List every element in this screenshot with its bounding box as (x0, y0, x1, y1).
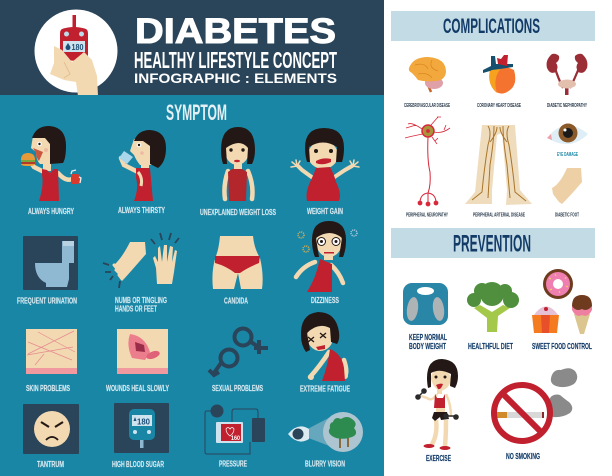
label: numb or tingling hands or feet: HANDS OR FEET (115, 304, 157, 314)
label: pressure: PRESSURE (219, 460, 247, 468)
label: diabetic foot: DIABETIC FOOT (555, 212, 579, 218)
subtitle: HEALTHY LIFESTYLE CONCEPT (134, 47, 337, 73)
icon: dizzy woman (296, 221, 357, 292)
icon: blood sugar meter (114, 403, 169, 453)
banner: complications (391, 11, 595, 41)
label: always hungry: ALWAYS HUNGRY (28, 207, 74, 216)
icon: woman losing weight (221, 127, 255, 201)
label: exercise: EXERCISE (426, 453, 451, 463)
icon: angry face (23, 404, 79, 454)
icon: blurry vision (288, 412, 363, 452)
label: sexual problems: SEXUAL PROBLEMS (212, 384, 263, 393)
label: coronary heart disease: CORONARY HEART DISEASE (477, 103, 521, 109)
label: eye damage: EYE DAMAGE (557, 152, 578, 158)
label: candida: CANDIDA (224, 296, 248, 306)
icon: no smoking (492, 368, 577, 441)
icon: blood pressure monitor (205, 404, 265, 454)
banner: prevention (391, 228, 595, 258)
label: wounds heal slowly: WOUNDS HEAL SLOWLY (106, 384, 169, 393)
label: keep normal body weight: KEEP NORMAL (409, 332, 447, 342)
panel: prevention (391, 228, 595, 463)
icon: glucose meter in hand: 180 (72, 43, 84, 52)
icon: brain (409, 57, 446, 92)
label: blurry vision: BLURRY VISION (305, 460, 345, 468)
heading: symptom: SYMPTOM (166, 100, 227, 125)
label: peripheral arterial disease: PERIPHERAL ARTERIAL DISEASE (473, 212, 525, 218)
title: DIABETES (135, 12, 336, 51)
icon: sexual symbols (209, 328, 268, 375)
panel: header (0, 0, 384, 96)
icon: cupcake (532, 306, 559, 333)
icon: candida (212, 236, 263, 289)
icon: kidneys (547, 54, 587, 95)
icon: eye (547, 124, 588, 144)
icon: glucose meter in hand (34, 10, 118, 96)
icon: toilet (23, 236, 78, 290)
icon: heart (483, 55, 515, 94)
icon: woman gaining weight (291, 128, 359, 201)
icon: legs arteries (465, 125, 532, 205)
icon: blood pressure monitor: 160 (231, 435, 240, 442)
label: dizziness: DIZZINESS (311, 296, 339, 305)
label: unexplained weight loss: UNEXPLAINED WEIGHT LOSS (200, 208, 276, 217)
label: keep normal body weight (409, 332, 447, 351)
icon: donut (543, 269, 573, 299)
label: no smoking: NO SMOKING (506, 451, 540, 461)
label: frequent urination: FREQUENT URINATION (17, 296, 77, 306)
label: weight gain: WEIGHT GAIN (307, 207, 343, 216)
panel: complications (391, 11, 595, 218)
icon: numb foot and hand (103, 233, 179, 288)
icon: fatigued woman (301, 312, 348, 381)
label: numb or tingling hands or feet: NUMB OR TINGLING (115, 296, 167, 305)
label: always thirsty: ALWAYS THIRSTY (118, 206, 165, 215)
label: keep normal body weight: BODY WEIGHT (409, 341, 446, 351)
icon: scale (403, 283, 448, 325)
banner: prevention: PREVENTION (453, 230, 531, 258)
icon: neuron (405, 117, 450, 206)
label: healthful diet: HEALTHFUL DIET (468, 341, 514, 351)
icon: exercising woman (415, 359, 459, 450)
label: skin problems: SKIN PROBLEMS (26, 384, 70, 393)
subheading: INFOGRAPHIC : ELEMENTS (134, 71, 337, 86)
label: extreme fatigue: EXTREME FATIGUE (300, 384, 350, 394)
label: cerebrovascular disease: CEREBROVASCULAR DISEASE (404, 103, 450, 109)
label: tantrum: TANTRUM (37, 460, 64, 469)
icon: woman eating (21, 126, 81, 201)
icon: skin problems (26, 329, 77, 374)
label: high blood sugar: HIGH BLOOD SUGAR (112, 460, 164, 469)
panel: symptom (0, 95, 384, 476)
icon: ice cream (572, 295, 592, 334)
label: peripheral neuropathy: PERIPHERAL NEUROPATHY (406, 212, 448, 218)
label: numb or tingling hands or feet (115, 296, 167, 314)
icon: wound (117, 329, 168, 374)
icon: woman drinking (119, 130, 166, 201)
icon: foot (552, 168, 582, 204)
icon: broccoli (467, 282, 519, 332)
icon: blood sugar meter: 180 (137, 418, 151, 426)
